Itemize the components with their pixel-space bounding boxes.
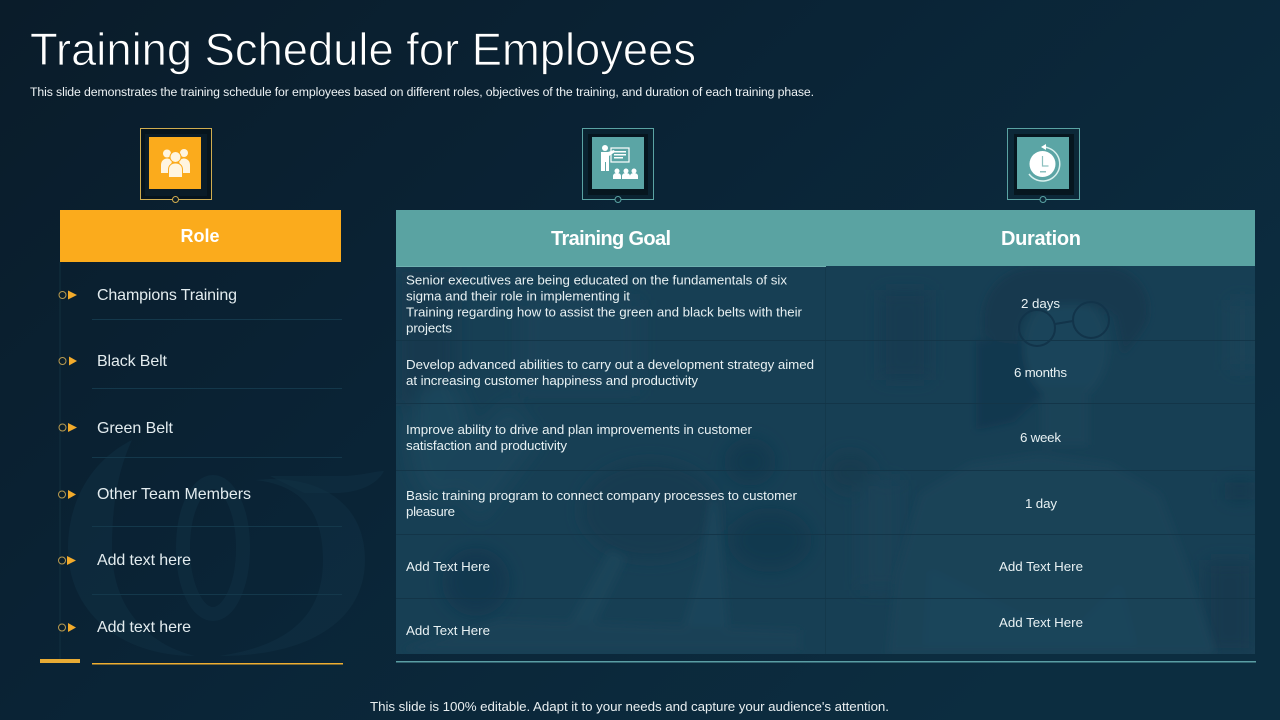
subtitle: This slide demonstrates the training schedule for employees based on different roles, objectives of the training, and duration of each training phase. [30, 85, 814, 99]
goal row 3: Improve ability to drive and plan improvements in customer [406, 422, 753, 437]
duration row 5: Add Text Here [999, 559, 1083, 574]
goal row 1: projects [406, 320, 452, 336]
icon: team [140, 128, 212, 202]
woman: torso [888, 454, 1216, 654]
footer note: This slide is 100% editable. Adapt it to your needs and capture your audience's attention. [370, 699, 889, 714]
title: Training Schedule for Employees [30, 24, 696, 75]
goal row 1 [406, 272, 803, 336]
goal row 2: Develop advanced abilities to carry out a development strategy aimed [406, 357, 814, 372]
goal row 3 [406, 422, 753, 453]
role: champions training: Champions Training [97, 287, 237, 304]
role: green belt [59, 420, 174, 437]
goal row 4 [406, 488, 798, 519]
goal row 5: Add Text Here [406, 559, 490, 574]
woman: hair [1042, 292, 1088, 304]
table bottom line [396, 661, 1256, 662]
woman: face [1025, 338, 1044, 385]
duration row 4: 1 day [1025, 496, 1057, 511]
photo tint overlay [396, 266, 1255, 654]
accent lines [40, 659, 343, 664]
goal row 6: Add Text Here [406, 623, 490, 638]
role header [60, 210, 341, 262]
role: green belt: Green Belt [97, 420, 174, 437]
duration column [999, 296, 1083, 630]
role: black belt: Black Belt [97, 353, 168, 370]
duration row 3: 6 week [1020, 430, 1061, 445]
role: black belt [59, 353, 168, 370]
goal row 4: pleasure [406, 504, 455, 519]
icon: trainer presentation [582, 128, 654, 202]
duration row 1: 2 days [1021, 296, 1060, 311]
table header [396, 210, 1255, 267]
role: other team members: Other Team Members [97, 486, 251, 503]
role header: Role [180, 226, 220, 246]
role: add text here 2: Add text here [97, 619, 191, 636]
duration row 2: 6 months [1014, 365, 1067, 380]
icon: clock [1008, 128, 1080, 202]
duration row 6: Add Text Here [999, 615, 1083, 630]
table header: Duration [1001, 228, 1081, 250]
sigma watermark [68, 440, 384, 656]
goal row 1: Senior executives are being educated on the fundamentals of six [406, 272, 787, 288]
goal row 3: satisfaction and productivity [406, 438, 567, 453]
goal row 1: Training regarding how to assist the green and black belts with their [406, 304, 803, 320]
goal row 2: at increasing customer happiness and productivity [406, 373, 698, 388]
training goal column [406, 272, 814, 638]
role: add text here 1: Add text here [97, 552, 191, 569]
woman: glasses [1019, 302, 1109, 346]
goal row 1: sigma and their role in implementing it [406, 288, 630, 304]
role list [58, 262, 342, 660]
table header: Training Goal [551, 228, 671, 250]
goal row 4: Basic training program to connect company processes to customer [406, 488, 798, 503]
woman: dark hair behind neck [982, 345, 1036, 424]
table row lines [396, 340, 1255, 599]
table photo panel [396, 266, 1255, 654]
goal row 2 [406, 357, 814, 388]
